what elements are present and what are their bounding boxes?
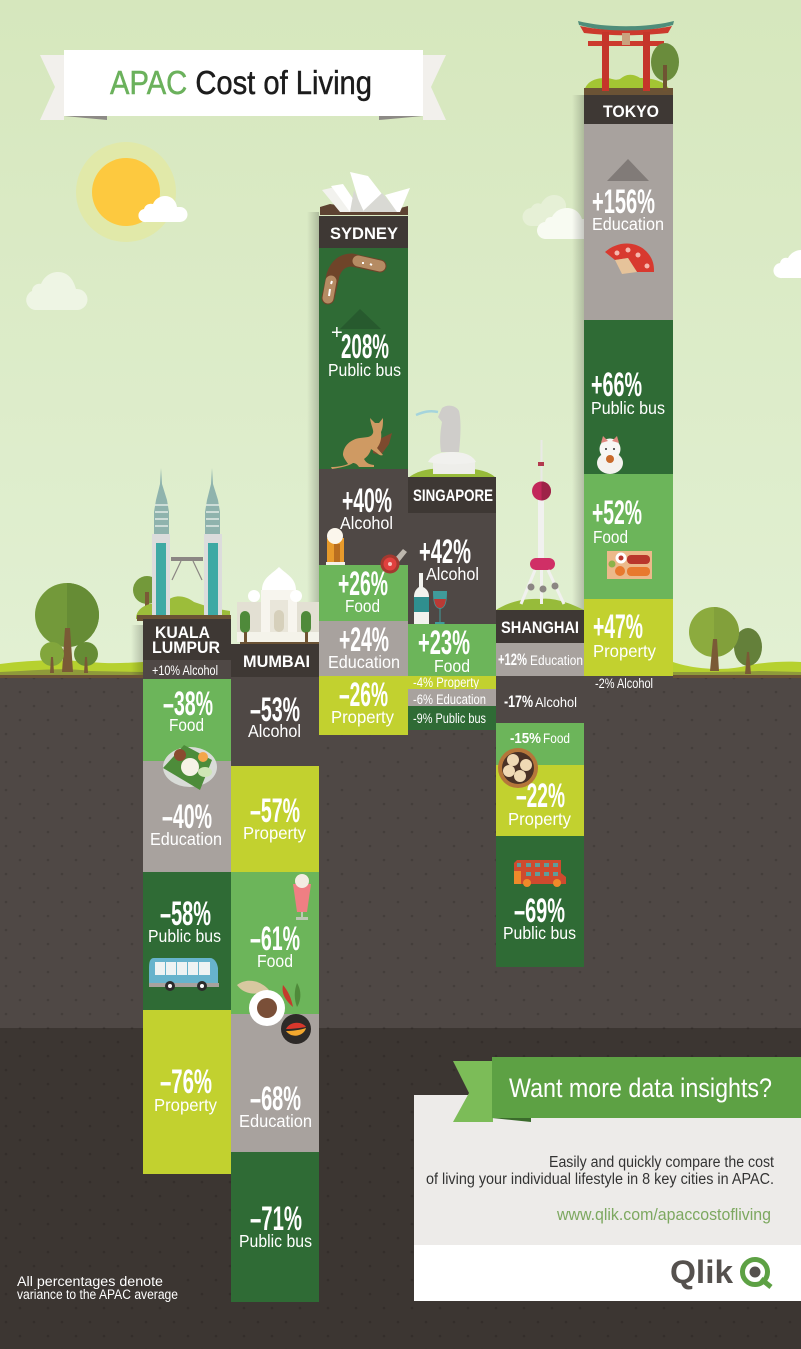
icon: torii gate <box>578 21 674 95</box>
segment: food -61% <box>231 872 319 1014</box>
segment: education +12% <box>496 643 584 676</box>
segment: alcohol +42%: +42% <box>419 533 471 571</box>
segment: property -76% <box>143 1010 231 1174</box>
icon: tree beside torii <box>651 43 679 91</box>
segment: property -57%: –57% <box>250 792 300 830</box>
segment: public bus +208%: Public bus <box>328 360 401 380</box>
background: sky <box>0 0 801 680</box>
icon: beer mug <box>326 528 345 565</box>
segment: alcohol -53%: –53% <box>250 691 300 729</box>
icon: dim sum basket <box>498 748 538 788</box>
segment: property -76%: –76% <box>160 1063 212 1101</box>
icon: wine bottle and glass <box>414 573 447 624</box>
segment: alcohol +40%: +40% <box>342 482 392 520</box>
column: Tokyo <box>584 95 673 691</box>
segment: alcohol +42% <box>408 513 496 624</box>
segment: public bus +208%: 208% <box>341 328 389 366</box>
description text: Easily and quickly compare the cost <box>549 1154 775 1171</box>
segment: food +52%: +52% <box>592 494 642 532</box>
sun <box>76 142 176 242</box>
cloud by the sun <box>138 196 188 222</box>
segment: education -68%: Education <box>239 1111 312 1131</box>
segment: food -15%: -15% <box>510 731 541 747</box>
icon: lucky cat <box>597 436 623 474</box>
segment: education -40%: Education <box>150 829 222 849</box>
segment: food -61%: Food <box>257 951 293 971</box>
up arrow <box>607 159 649 181</box>
header: Tokyo <box>584 95 673 124</box>
segment: property -76%: Property <box>154 1095 217 1115</box>
segment: public bus +208%: + <box>331 322 343 344</box>
header: Sydney: SYDNEY <box>330 224 399 243</box>
segment: property -26%: Property <box>331 707 394 727</box>
segment: education -40% <box>143 761 231 872</box>
footnote: All percentages denote <box>17 1274 163 1289</box>
header: Kuala Lumpur: LUMPUR <box>152 638 220 657</box>
grass left <box>0 660 143 678</box>
icon: sushi board <box>607 551 652 579</box>
segment: education +156%: Education <box>592 214 664 234</box>
segment: property +47% <box>584 599 673 676</box>
column: Singapore <box>408 477 496 730</box>
column: Shanghai <box>496 610 584 967</box>
segment: alcohol -17%: -17% <box>504 693 533 711</box>
banner: want more data insights <box>453 1057 801 1122</box>
segment: public bus -58%: Public bus <box>148 926 221 946</box>
segment: property -22%: –22% <box>516 777 565 815</box>
icon: spices <box>237 981 311 1044</box>
column: Mumbai <box>231 644 319 1302</box>
segment: education +156% <box>584 124 673 320</box>
segment: alcohol +42%: Alcohol <box>426 564 479 584</box>
segment: food +23%: +23% <box>418 624 470 662</box>
segment: public bus -71%: Public bus <box>239 1231 312 1251</box>
segment: alcohol -53%: Alcohol <box>248 721 301 741</box>
icon: nasi lemak plate <box>163 745 217 790</box>
segment: public bus +66%: +66% <box>591 366 642 404</box>
segment: property +47%: +47% <box>593 608 643 646</box>
icon: Taj cypress trees <box>240 611 311 643</box>
footnote: variance to the APAC average <box>17 1287 178 1302</box>
header: Tokyo: TOKYO <box>603 102 659 121</box>
cloud lower left <box>26 272 88 310</box>
header: Shanghai: SHANGHAI <box>501 618 579 637</box>
icon: kangaroo <box>331 418 392 469</box>
segment: food +23%: Food <box>434 656 470 676</box>
website link: www.qlik.com/apaccostofliving <box>556 1206 771 1224</box>
header: Kuala Lumpur: KUALA <box>155 623 210 642</box>
Qlik logo: Qlik <box>670 1254 733 1290</box>
icon: Merlion <box>408 406 496 480</box>
segment: education -40%: –40% <box>162 798 212 836</box>
header: Shanghai <box>496 610 584 643</box>
segment: alcohol -2%: -2% Alcohol <box>595 676 653 691</box>
segment: public bus +66% <box>584 320 673 474</box>
icon: boomerang <box>328 260 380 298</box>
segment: public bus -71% <box>231 1152 319 1302</box>
header: Singapore <box>408 477 496 513</box>
cloud right edge <box>773 250 801 278</box>
icon: folding fan <box>605 243 654 274</box>
segment: property -22% <box>496 765 584 836</box>
segment: food -61%: –61% <box>250 920 300 958</box>
segment: education -6%: -6% Education <box>413 692 486 707</box>
segment: food +23% <box>408 624 496 676</box>
description text <box>426 1154 775 1188</box>
trees right <box>689 607 762 674</box>
segment: food +26%: +26% <box>338 565 388 603</box>
icon: roast meat <box>380 549 407 574</box>
ground <box>0 678 801 1349</box>
segment: public bus +66%: Public bus <box>591 398 665 418</box>
segment: property -57% <box>231 766 319 872</box>
segment: alcohol -17%: Alcohol <box>535 695 577 710</box>
up arrow <box>340 309 381 329</box>
segment: property -26%: –26% <box>339 676 388 714</box>
segment: public bus -9% <box>408 706 496 730</box>
segment: food +26%: Food <box>345 596 380 616</box>
footnote <box>17 1274 178 1302</box>
segment: food +52%: Food <box>593 527 628 547</box>
clouds centre <box>522 195 584 239</box>
description text: of living your individual lifestyle in 8 key cities in APAC. <box>426 1171 774 1188</box>
segment: education +12%: +12% <box>498 651 527 669</box>
segment: food +26% <box>319 565 408 621</box>
segment: alcohol -17% <box>496 676 584 723</box>
segment: property +47%: Property <box>593 641 656 661</box>
column shadows <box>131 95 584 675</box>
segment: food -15% <box>496 723 584 765</box>
segment: property -22%: Property <box>508 809 571 829</box>
column: Kuala Lumpur <box>143 619 231 1174</box>
segment: alcohol -53% <box>231 677 319 766</box>
segment: alcohol +10%: +10% Alcohol <box>152 663 218 678</box>
segment: food +52% <box>584 474 673 599</box>
segment: public bus -58%: –58% <box>160 895 211 933</box>
title text: APAC Cost of Living <box>110 64 372 101</box>
header: Singapore: SINGAPORE <box>413 486 493 505</box>
header: Kuala Lumpur <box>143 619 231 660</box>
segment: public bus -71%: –71% <box>250 1200 302 1238</box>
segment: property -26% <box>319 676 408 735</box>
segment: education -68%: –68% <box>250 1080 301 1118</box>
Qlik logo <box>670 1254 771 1290</box>
header: Sydney <box>319 216 408 248</box>
segment: food -38%: –38% <box>163 685 213 723</box>
segment: property -4%: -4% Property <box>413 675 479 690</box>
icon: Petronas towers, Kuala Lumpur <box>136 468 231 621</box>
icon: blue bus <box>149 958 219 991</box>
title banner <box>40 50 446 120</box>
icon: Taj Mahal <box>237 567 319 645</box>
icon: Oriental Pearl Tower, Shanghai <box>496 440 584 610</box>
trees left <box>35 576 161 673</box>
grass right <box>673 662 801 678</box>
icon: Sydney Opera House <box>320 172 410 215</box>
segment: public bus -69% <box>496 836 584 967</box>
segment: public bus -9%: -9% Public bus <box>413 711 486 726</box>
segment: alcohol +40%: Alcohol <box>340 513 393 533</box>
header: Mumbai <box>231 644 319 677</box>
column: Sydney <box>319 216 408 735</box>
segment: food -38%: Food <box>169 715 204 735</box>
segment: property -57%: Property <box>243 823 306 843</box>
segment: public bus -58% <box>143 872 231 1010</box>
segment: education +12%: Education <box>530 653 583 668</box>
segment: public bus -69%: –69% <box>514 892 565 930</box>
segment: education +24%: +24% <box>339 621 389 659</box>
segment: food -38% <box>143 679 231 761</box>
panel: call to action <box>414 1057 801 1301</box>
segment: public bus -69%: Public bus <box>503 923 576 943</box>
icon: milkshake <box>293 874 311 920</box>
header: Mumbai: MUMBAI <box>243 652 310 671</box>
segment: alcohol +10% <box>143 660 231 679</box>
segment: education +156%: +156% <box>592 183 655 221</box>
segment: education +24%: Education <box>328 652 400 672</box>
segment: public bus +208% <box>319 248 408 469</box>
segment: food -15%: Food <box>543 731 570 746</box>
icon: red double-decker bus <box>514 860 566 887</box>
segment: education -68% <box>231 1014 319 1152</box>
segment: education +24% <box>319 621 408 676</box>
segment: alcohol +40% <box>319 469 408 565</box>
